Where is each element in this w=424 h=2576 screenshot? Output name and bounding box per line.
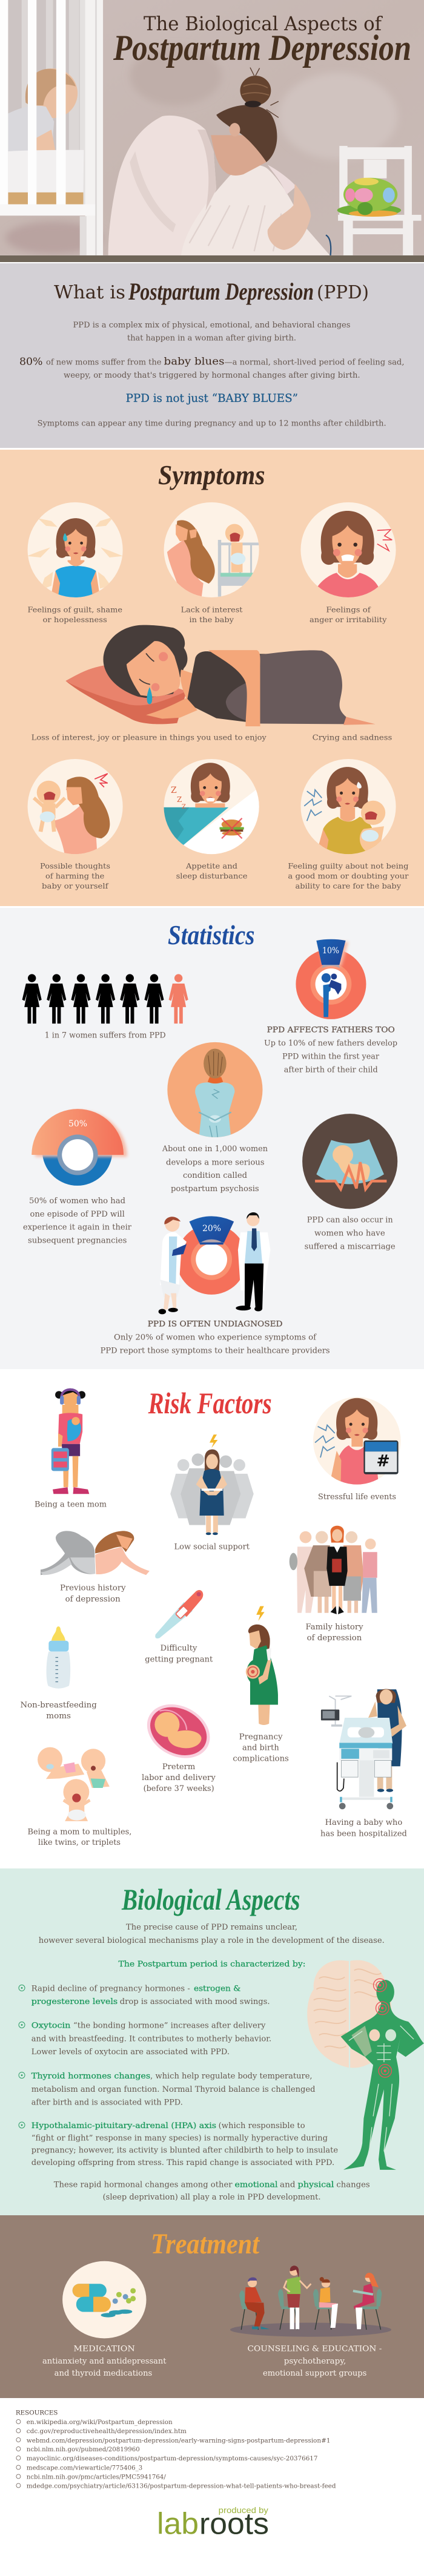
intro text	[39, 1923, 385, 1945]
closing text: physical	[298, 2180, 334, 2189]
treatment text: MEDICATION	[73, 2344, 135, 2353]
statistics text: Only 20% of women who experience symptoms of	[114, 1333, 317, 1342]
icon: preterm fetus	[137, 1694, 219, 1769]
intro text: The precise cause of PPD remains unclear,	[126, 1923, 297, 1932]
heading: risk factors: Risk Factors	[148, 1386, 272, 1420]
icon: counseling group	[230, 2266, 391, 2337]
bullet: HPA axis: (which responsible to	[219, 2121, 305, 2131]
icon: low social support	[170, 1434, 254, 1535]
captions: risk factors: labor and delivery	[142, 1773, 216, 1782]
heading: what is PPD: (PPD)	[317, 282, 369, 303]
baby blues text: of new moms suffer from the	[46, 358, 162, 367]
treatment text	[42, 2344, 382, 2378]
captions: risk factors: Low social support	[174, 1542, 250, 1551]
heading: what is PPD: What is	[54, 282, 125, 303]
captions: symptoms: of harming the	[45, 871, 104, 880]
resources list: webmd.com/depression/postpartum-depression/early-warning-signs-postpartum-depression#1	[27, 2437, 331, 2444]
statistics text: 50% of women who had	[29, 1197, 125, 1206]
bullet: estrogen and progesterone	[19, 1984, 270, 2006]
statistics text: postpartum psychosis	[171, 1184, 259, 1194]
resources list	[16, 2410, 336, 2490]
icons: lower risk factor illustrations	[38, 1689, 406, 1821]
bullet: HPA axis: pregnancy; however, its activity is blunted after childbirth to help to insulate	[31, 2146, 338, 2155]
treatment text: antianxiety and antidepressant	[42, 2357, 167, 2366]
heading: symptoms: Symptoms	[158, 459, 265, 490]
captions: symptoms: a good mom or doubting your	[288, 871, 409, 880]
icon: lack of interest	[164, 502, 259, 598]
icon: stressful life events	[313, 1397, 401, 1487]
captions: risk factors: Non-breastfeeding	[21, 1701, 97, 1710]
Z letters on sleep icon: Z	[171, 786, 177, 795]
heading: biological aspects: Biological Aspects	[121, 1882, 300, 1916]
captions: risk factors: Having a baby who	[325, 1818, 402, 1827]
bullet: thyroid	[19, 2072, 316, 2108]
icon: hospitalized baby incubator	[321, 1689, 406, 1809]
logo: labroots: roots	[199, 2507, 269, 2541]
icon: head of mother at incubator	[376, 1689, 396, 1704]
resources list: ncbi.nlm.nih.gov/pmc/articles/PMC5941764/	[27, 2474, 166, 2480]
callout: not just baby blues: PPD is not just “BABY BLUES”	[126, 392, 298, 405]
bullet: estrogen and progesterone: progesterone levels	[31, 1997, 118, 2006]
captions: symptoms: sleep disturbance	[176, 871, 247, 880]
captions: symptoms: anger or irritability	[310, 615, 387, 624]
bullet: thyroid: , which help regulate body temperature,	[150, 2072, 313, 2081]
bullet: oxytocin: and with breastfeeding. It contributes to motherly behavior.	[31, 2034, 271, 2043]
panel: symptoms	[0, 450, 424, 906]
logo: labroots: lab	[157, 2507, 199, 2541]
captions: risk factors: has been hospitalized	[320, 1829, 407, 1839]
definition text	[73, 321, 350, 343]
icon: appetite and sleep	[162, 759, 260, 856]
captions: symptoms: Appetite and	[185, 861, 237, 870]
icon: anger	[300, 502, 396, 599]
statistics text: develops a more serious	[166, 1158, 265, 1167]
icon: crying woman lying down	[65, 625, 376, 726]
bullet: thyroid: after birth and is associated with PPD.	[31, 2098, 183, 2108]
icon: family history	[290, 1526, 377, 1614]
icon: teen mom	[51, 1388, 89, 1494]
Z letters on sleep icon	[171, 786, 186, 810]
resources list: medscape.com/viewarticle/775406_3	[27, 2465, 142, 2471]
statistics text: Up to 10% of new fathers develop	[264, 1039, 397, 1048]
icon: 1 in 7 women	[22, 974, 188, 1024]
captions: risk factors: Being a teen mom	[35, 1500, 107, 1510]
captions: symptoms: Feeling guilty about not being	[288, 861, 408, 870]
bullet: thyroid: Thyroid hormones changes	[31, 2072, 150, 2081]
statistics text: women who have	[314, 1229, 385, 1238]
icon: guilty mom	[300, 759, 396, 856]
chart: 50% recurrence	[31, 1109, 127, 1186]
closing text: and	[280, 2180, 296, 2189]
captions: risk factors: Preterm	[162, 1763, 195, 1772]
captions: risk factors: of depression	[65, 1595, 121, 1604]
logo: labroots	[157, 2505, 269, 2541]
definition text: that happen in a woman after giving birth.	[127, 334, 296, 343]
captions: symptoms: Loss of interest, joy or pleasure in things you used to enjoy	[31, 732, 267, 741]
Z letters on sleep icon: Z	[177, 795, 182, 804]
captions: risk factors: Stressful life events	[318, 1493, 396, 1502]
subheading: postpartum period: The Postpartum period is characterized by:	[119, 1960, 305, 1969]
captions: symptoms: Possible thoughts	[40, 861, 110, 870]
captions: risk factors: moms	[46, 1712, 71, 1721]
bullet: HPA axis: Hypothalamic-pituitary-adrenal (HPA) axis	[31, 2121, 216, 2131]
captions: risk factors: and birth	[242, 1743, 279, 1753]
icon: previous history of depression	[41, 1531, 150, 1575]
chart labels: 10%	[322, 946, 339, 956]
resources list: cdc.gov/reproductivehealth/depression/index.htm	[27, 2428, 187, 2435]
treatment text: COUNSELING & EDUCATION -	[247, 2344, 382, 2353]
captions: symptoms: ability to care for the baby	[296, 881, 402, 890]
captions: symptoms: in the baby	[189, 615, 234, 624]
bullet: estrogen and progesterone: Rapid decline of pregnancy hormones -	[31, 1984, 190, 1993]
resources list: mayoclinic.org/diseases-conditions/postpartum-depression/symptoms-causes/syc-20376617	[27, 2456, 317, 2462]
bullet: oxytocin: “the bonding hormone” increases after delivery	[73, 2021, 266, 2030]
definition text: PPD is a complex mix of physical, emotional, and behavioral changes	[73, 321, 350, 330]
captions: risk factors: getting pregnant	[145, 1655, 213, 1664]
statistics text: PPD within the first year	[282, 1053, 380, 1062]
chart labels	[68, 946, 339, 1234]
bullet: HPA axis	[19, 2121, 338, 2167]
statistics text	[23, 1025, 397, 1355]
bullet: estrogen and progesterone: drop is associated with mood swings.	[120, 1997, 270, 2006]
baby blues text: 80%	[19, 356, 42, 368]
treatment text: and thyroid medications	[55, 2369, 152, 2378]
captions: symptoms	[28, 605, 409, 890]
intro text: however several biological mechanisms play a role in the development of the disease.	[39, 1936, 385, 1945]
band	[0, 255, 424, 262]
icon: medication	[62, 2261, 147, 2338]
captions: risk factors: (before 37 weeks)	[144, 1784, 214, 1793]
closing text: These rapid hormonal changes among other	[54, 2180, 233, 2189]
icon: pregnancy test	[155, 1590, 203, 1638]
treatment text: emotional support groups	[263, 2369, 366, 2378]
symptom timing text: Symptoms can appear any time during pregnancy and up to 12 months after childbirth.	[38, 419, 386, 429]
statistics text: About one in 1,000 women	[162, 1145, 268, 1154]
statistics text: subsequent pregnancies	[28, 1237, 127, 1246]
captions: risk factors: complications	[233, 1754, 289, 1763]
captions: risk factors: of depression	[307, 1634, 362, 1643]
captions: symptoms: Feelings of	[326, 605, 371, 614]
bullet: thyroid: metabolism and organ function. Normal Thyroid balance is challenged	[31, 2085, 316, 2094]
captions: symptoms: Crying and sadness	[313, 732, 392, 741]
captions: risk factors: Being a mom to multiples,	[28, 1827, 131, 1836]
title: The Biological Aspects of	[144, 12, 383, 35]
chart: 10% fathers	[296, 939, 366, 1019]
statistics text: PPD IS OFTEN UNDIAGNOSED	[148, 1319, 282, 1329]
icon: baby bottle	[47, 1626, 70, 1689]
closing text: changes	[336, 2180, 370, 2189]
captions: risk factors: like twins, or triplets	[38, 1838, 121, 1847]
statistics text: PPD can also occur in	[307, 1216, 393, 1225]
captions: risk factors: Previous history	[60, 1584, 126, 1593]
panel: what is PPD	[0, 263, 424, 448]
heading: statistics: Statistics	[168, 919, 254, 950]
baby blues text: baby blues	[164, 356, 224, 368]
bullet: estrogen and progesterone: estrogen &	[194, 1984, 240, 1993]
bullet: HPA axis: “fight or flight” response in many species) is normally hyperactive during	[31, 2134, 328, 2143]
panel: biological aspects	[0, 1868, 424, 2215]
chart labels: 20%	[202, 1224, 221, 1234]
bullet: HPA axis: developing offspring from stress. This rapid change is associated with PPD.	[31, 2158, 334, 2167]
chart: 20% undiagnosed with doctors	[159, 1212, 270, 1314]
captions: symptoms: Feelings of guilt, shame	[28, 605, 122, 614]
statistics text: PPD AFFECTS FATHERS TOO	[267, 1025, 395, 1034]
panel: statistics	[0, 908, 424, 1369]
closing text	[54, 2180, 370, 2202]
baby blues text: —a normal, short-lived period of feeling sad,	[224, 358, 405, 367]
resources list: RESOURCES	[16, 2410, 58, 2416]
closing text: (sleep deprivation) all play a role in PPD development.	[103, 2193, 321, 2202]
panel: hero	[0, 0, 424, 255]
resources list: mdedge.com/psychiatry/article/63136/postpartum-depression-what-tell-patients-who-breast-feed	[27, 2483, 336, 2490]
icon: harming thoughts	[28, 759, 123, 856]
statistics text: one episode of PPD will	[30, 1210, 125, 1219]
captions: symptoms: or hopelessness	[42, 615, 107, 624]
captions: risk factors	[21, 1493, 407, 1847]
logo: labroots: produced by	[219, 2505, 268, 2515]
captions: risk factors: Difficulty	[161, 1644, 197, 1653]
illustration: psychosis	[167, 1042, 262, 1139]
icons: symptoms illustrations	[27, 502, 396, 856]
panel: risk factors	[21, 1386, 407, 1847]
statistics text: 1 in 7 women suffers from PPD	[45, 1031, 166, 1040]
heading: what is PPD: Postpartum Depression	[128, 278, 314, 305]
icon: triplets	[38, 1747, 110, 1821]
icon: brain and body	[307, 1960, 424, 2170]
treatment text: psychotherapy,	[284, 2357, 346, 2366]
captions: risk factors: Family history	[305, 1623, 363, 1632]
statistics text: after birth of their child	[284, 1065, 378, 1074]
heading: treatment: Treatment	[151, 2228, 260, 2260]
Z letters on sleep icon: Z	[182, 804, 186, 810]
icon: stressful life events: #	[376, 1451, 390, 1470]
closing text: emotional	[235, 2180, 277, 2189]
statistics text: condition called	[183, 1171, 247, 1180]
captions: risk factors: Pregnancy	[239, 1733, 283, 1742]
resources list: en.wikipedia.org/wiki/Postpartum_depression	[27, 2419, 173, 2426]
resources list: ncbi.nlm.nih.gov/pubmed/20819960	[27, 2446, 140, 2453]
illustration: miscarriage	[302, 1114, 397, 1209]
icon: guilt	[27, 502, 123, 599]
statistics text: experience it again in their	[23, 1223, 132, 1232]
captions: symptoms: Lack of interest	[181, 605, 242, 614]
hero photo: mother and baby	[0, 0, 424, 255]
bullet: oxytocin: Oxytocin	[31, 2021, 71, 2030]
icons: statistics graphics	[22, 939, 397, 1314]
panel: treatment	[0, 2215, 424, 2398]
baby blues text: weepy, or moody that's triggered by hormonal changes after giving birth.	[64, 371, 360, 380]
icons: risk factor illustrations	[41, 1388, 401, 1725]
captions: symptoms: baby or yourself	[42, 881, 109, 890]
statistics text: suffered a miscarriage	[305, 1242, 396, 1251]
chart labels: 50%	[68, 1119, 87, 1129]
baby blues text	[19, 356, 405, 380]
title	[113, 12, 411, 68]
icon: pregnant woman	[246, 1606, 278, 1725]
bullet: oxytocin: Lower levels of oxytocin are associated with PPD.	[31, 2048, 230, 2057]
statistics text: PPD report those symptoms to their healthcare providers	[101, 1346, 330, 1355]
bullet: oxytocin	[19, 2021, 271, 2057]
